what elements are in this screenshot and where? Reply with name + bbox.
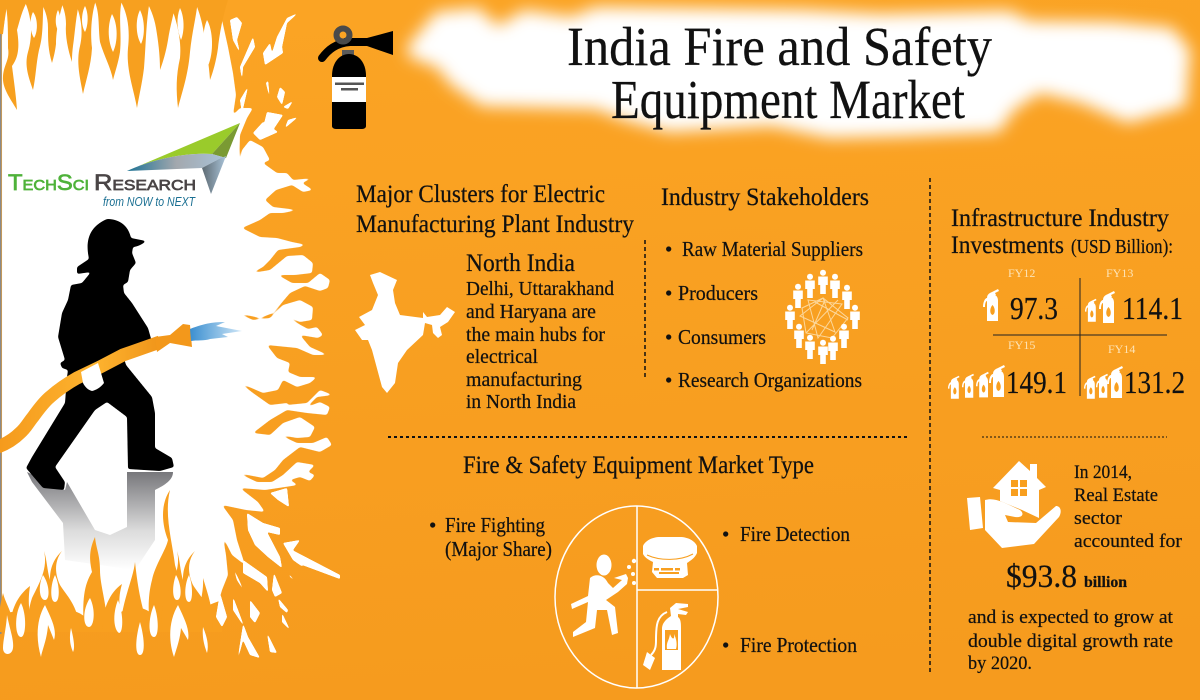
icon: fire extinguisher bbox=[322, 28, 393, 129]
text: North India: the main hubs for bbox=[466, 324, 605, 346]
text: North India bbox=[466, 250, 614, 413]
text: North India: Delhi, Uttarakhand bbox=[466, 278, 614, 300]
text: North India: in North India bbox=[466, 391, 576, 413]
text: growth: double digital growth rate bbox=[968, 631, 1173, 652]
heading: major clusters: Manufacturing Plant Industry bbox=[356, 211, 634, 238]
FY15 bbox=[948, 338, 1067, 400]
FY14 bbox=[1084, 342, 1185, 400]
heading: infrastructure investments: Investments bbox=[951, 232, 1064, 259]
text: real estate bbox=[1074, 462, 1183, 552]
nozzle bbox=[155, 324, 192, 352]
list: stakeholders: Producers bbox=[678, 281, 758, 305]
logo: TechSci Research: TechSci bbox=[8, 170, 89, 195]
title: Equipment Market bbox=[611, 69, 965, 130]
list: stakeholders: Research Organizations bbox=[678, 368, 862, 392]
logo: TechSci Research bbox=[8, 123, 240, 209]
list: stakeholders: • bbox=[665, 368, 672, 392]
title: India Fire and Safety bbox=[567, 16, 992, 77]
FY12: FY12 bbox=[1008, 266, 1035, 280]
text: growth: by 2020. bbox=[968, 653, 1032, 674]
stat: 93.8 billion bbox=[1006, 559, 1127, 595]
hose bbox=[0, 342, 160, 447]
label: fire fighting: Fire Fighting bbox=[445, 513, 545, 537]
FY14: FY14 bbox=[1108, 342, 1135, 356]
market type circle bbox=[555, 506, 718, 688]
icon: extinguisher bbox=[643, 603, 688, 670]
heading: infrastructure investments bbox=[951, 205, 1173, 259]
label: fire detection: • bbox=[722, 522, 729, 546]
text: real estate: accounted for bbox=[1074, 531, 1183, 552]
icon: people network bbox=[785, 270, 860, 364]
list: stakeholders bbox=[665, 237, 863, 392]
list: stakeholders: • bbox=[665, 325, 672, 349]
floor reflection shadow bbox=[27, 472, 173, 570]
chart: investments by fiscal year bbox=[948, 266, 1185, 400]
cloud behind title bbox=[408, 7, 1190, 138]
icon: house on hand bbox=[967, 461, 1061, 548]
title bbox=[567, 16, 992, 130]
glove bbox=[81, 363, 104, 391]
heading: industry stakeholders: Industry Stakeholders bbox=[661, 184, 869, 211]
heading: market type: Fire & Safety Equipment Market Type bbox=[463, 452, 814, 479]
bottom rising flames bbox=[0, 490, 222, 632]
white teardrops in bottom flames bbox=[3, 575, 208, 657]
white flame panel with firefighter bbox=[0, 0, 340, 663]
left edge line bbox=[0, 34, 2, 634]
label: fire fighting: • bbox=[429, 513, 436, 537]
text: real estate: sector bbox=[1074, 508, 1123, 529]
label: fire fighting: (Major Share) bbox=[445, 537, 552, 561]
FY12 bbox=[983, 266, 1058, 326]
heading: major clusters bbox=[356, 181, 634, 238]
logo: TechSci Research: from NOW to NEXT bbox=[103, 194, 196, 209]
FY13 bbox=[1085, 266, 1183, 326]
text: North India: and Haryana are bbox=[466, 301, 596, 323]
label: fire detection: Fire Detection bbox=[740, 522, 850, 546]
heading: major clusters: Major Clusters for Electric bbox=[356, 181, 605, 208]
label: fire fighting bbox=[429, 513, 552, 561]
label: fire protection: • bbox=[722, 633, 729, 657]
list: stakeholders: • bbox=[665, 281, 672, 305]
text: North India: electrical bbox=[466, 346, 538, 368]
icon: smoke detector bbox=[643, 537, 697, 578]
FY15: FY15 bbox=[1008, 338, 1035, 352]
logo: TechSci Research: Research bbox=[94, 170, 196, 195]
water jet bbox=[190, 322, 242, 341]
white wisps lower right bbox=[216, 488, 340, 663]
FY13: FY13 bbox=[1106, 266, 1133, 280]
icon: firefighter bbox=[571, 554, 636, 637]
white burst bbox=[2, 0, 333, 625]
list: stakeholders: Consumers bbox=[678, 325, 766, 349]
icon: India map bbox=[355, 272, 455, 393]
text: real estate: Real Estate bbox=[1074, 485, 1158, 506]
list: stakeholders: • bbox=[665, 237, 672, 261]
text: growth: and is expected to grow at bbox=[968, 607, 1174, 628]
text: real estate: In 2014, bbox=[1074, 462, 1132, 483]
heading: infrastructure investments: Infrastructure Industry bbox=[951, 205, 1169, 232]
top hanging flames bbox=[0, 0, 228, 110]
FY13: 114.1 bbox=[1122, 290, 1183, 326]
FY12: 97.3 bbox=[1010, 290, 1058, 326]
FY15: 149.1 bbox=[1006, 364, 1067, 400]
text: growth bbox=[968, 607, 1174, 674]
stat: 93.8 billion: $93.8 bbox=[1006, 559, 1077, 595]
text: North India: North India bbox=[466, 250, 575, 277]
FY14: 131.2 bbox=[1124, 364, 1185, 400]
label: fire protection: Fire Protection bbox=[740, 633, 857, 657]
white wisps upper right bbox=[230, 13, 298, 140]
heading: infrastructure investments: (USD Billion): bbox=[1071, 236, 1173, 258]
list: stakeholders: Raw Material Suppliers bbox=[682, 237, 863, 261]
text: North India: manufacturing bbox=[466, 369, 582, 391]
white teardrops in top flames bbox=[30, 6, 212, 66]
firefighter silhouette bbox=[26, 219, 174, 490]
stat: 93.8 billion: billion bbox=[1084, 574, 1127, 591]
